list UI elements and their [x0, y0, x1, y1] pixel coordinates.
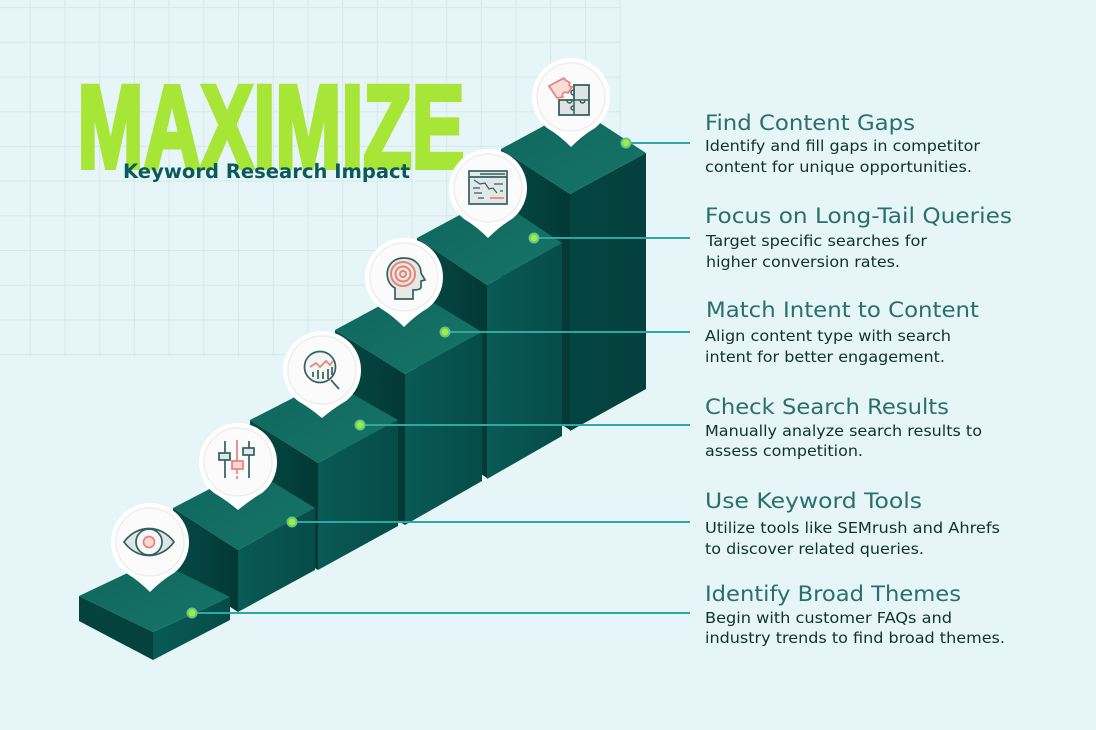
text block: Find Content Gaps: Identify and fill gaps in competitor	[705, 137, 981, 155]
text block: Check Search Results: assess competition.	[705, 442, 863, 460]
icon: eye	[124, 528, 174, 556]
connector dots	[188, 138, 630, 618]
title: MAXIMIZE: MAXIMIZE	[78, 62, 464, 194]
connector line 6	[626, 142, 690, 144]
text block: Match Intent to Content: intent for better engagement.	[705, 348, 945, 366]
block 6	[501, 108, 646, 431]
text block: Identify Broad Themes: Begin with customer FAQs and	[705, 609, 952, 627]
subtitle: Keyword Research Impact	[123, 160, 410, 183]
pin: eye icon	[111, 503, 189, 592]
connector line 3	[360, 424, 690, 426]
pin: sliders icon	[199, 423, 277, 510]
staircase chart	[79, 108, 646, 660]
block 4	[335, 289, 482, 525]
connector line 2	[292, 521, 690, 523]
text block: Identify Broad Themes: Identify Broad Themes	[705, 582, 961, 607]
icon: head with maze	[387, 258, 425, 299]
icon: sliders	[219, 440, 254, 479]
pin: magnifier chart icon	[283, 331, 361, 418]
text block: Use Keyword Tools	[705, 489, 1000, 558]
icon: browser window	[469, 171, 507, 204]
text block: Check Search Results: Check Search Results	[705, 395, 949, 420]
pin: browser icon	[449, 149, 527, 238]
block 2	[173, 468, 315, 612]
text block: Match Intent to Content	[705, 298, 979, 366]
text block: Match Intent to Content: Align content type with search	[705, 327, 951, 345]
text block: Check Search Results	[705, 395, 982, 460]
icon: puzzle pieces	[549, 78, 589, 115]
block 3	[250, 380, 398, 570]
icon: magnifier with chart	[304, 352, 339, 389]
pin: brain maze head icon	[365, 238, 443, 327]
text block: Focus on Long-Tail Queries: higher conversion rates.	[706, 253, 900, 271]
text block: Find Content Gaps	[705, 111, 981, 176]
text block: Focus on Long-Tail Queries	[705, 204, 1012, 271]
text block: Focus on Long-Tail Queries: Focus on Long-Tail Queries	[705, 204, 1012, 229]
text block: Focus on Long-Tail Queries: Target specific searches for	[705, 232, 928, 250]
connector line 1	[192, 612, 690, 614]
pin: puzzle icon	[532, 58, 610, 147]
text block: Find Content Gaps: Find Content Gaps	[705, 111, 915, 136]
text block: Find Content Gaps: content for unique opportunities.	[705, 158, 972, 176]
connector line 4	[445, 331, 690, 333]
text block: Check Search Results: Manually analyze search results to	[705, 422, 982, 440]
text block: Use Keyword Tools: to discover related queries.	[705, 540, 924, 558]
text block: Match Intent to Content: Match Intent to Content	[706, 298, 979, 323]
text block: Use Keyword Tools: Utilize tools like SEMrush and Ahrefs	[705, 519, 1000, 537]
block 5	[417, 197, 562, 479]
text block: Use Keyword Tools: Use Keyword Tools	[705, 489, 922, 514]
block 1	[79, 560, 230, 660]
text block: Identify Broad Themes: industry trends to find broad themes.	[705, 629, 1005, 647]
connector line 5	[534, 237, 690, 239]
text block: Identify Broad Themes	[705, 582, 1005, 647]
